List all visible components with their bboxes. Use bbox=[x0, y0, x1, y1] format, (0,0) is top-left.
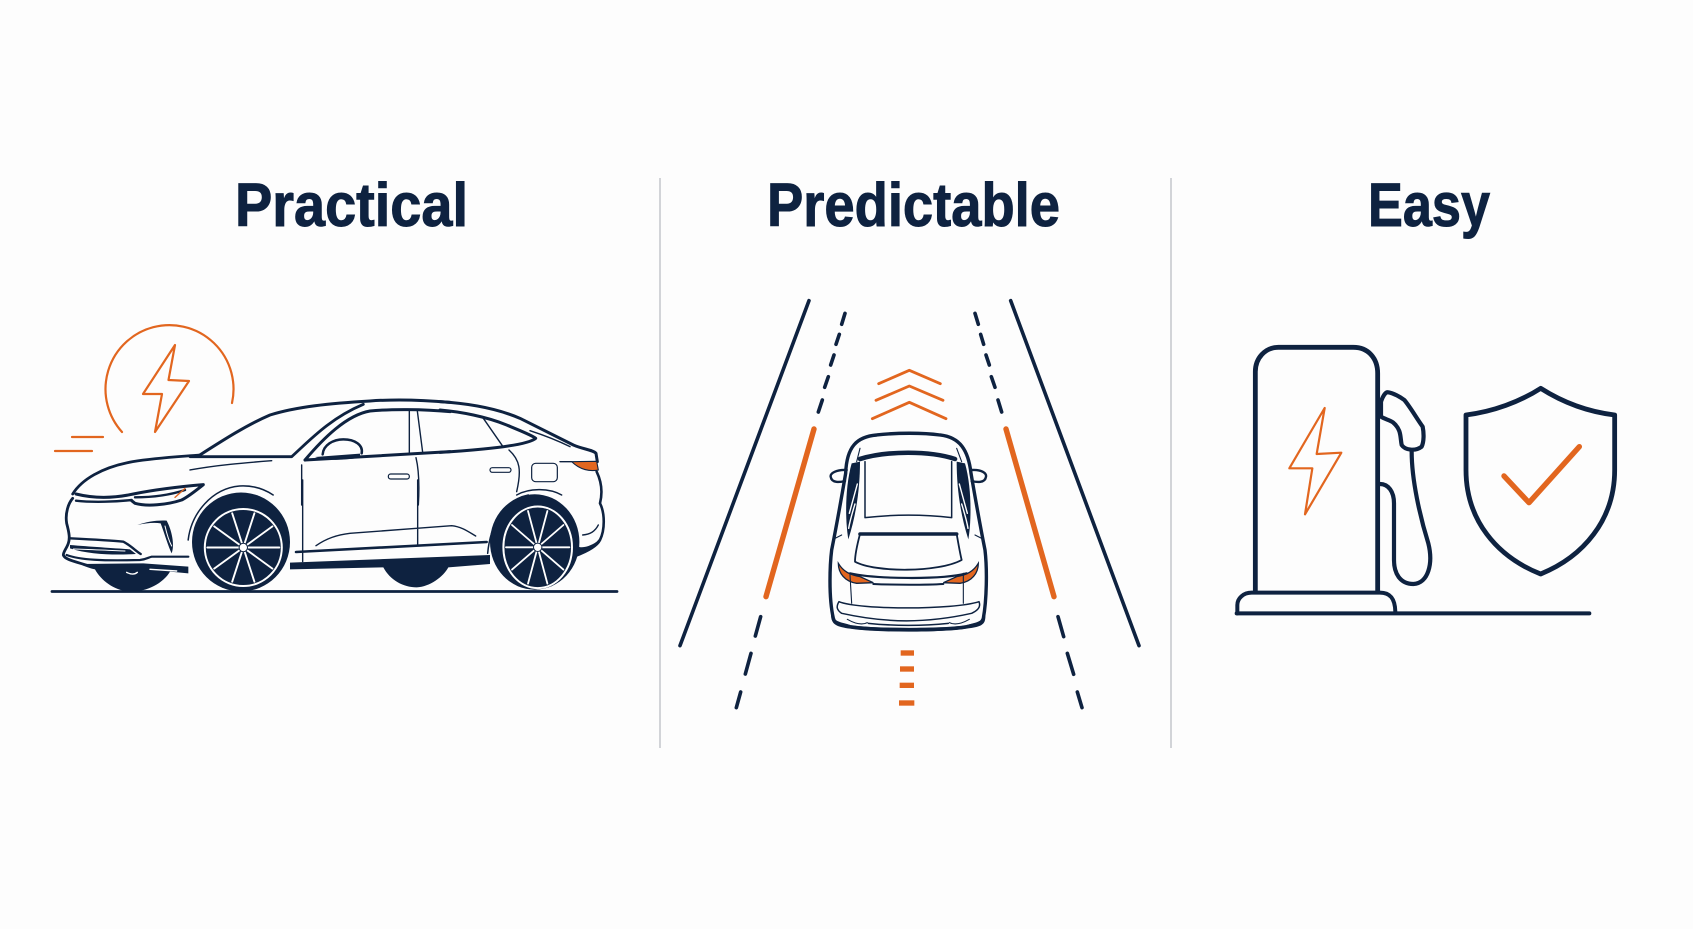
icon: charging station bbox=[1237, 347, 1589, 613]
heading: Practical: Practical bbox=[235, 171, 468, 239]
dashes behind car bbox=[899, 650, 914, 706]
icon: shield with check bbox=[1466, 388, 1615, 574]
panel: practical electric car illustration bbox=[52, 325, 617, 592]
divider: left bbox=[659, 178, 661, 748]
car rear top view bbox=[830, 433, 986, 632]
heading: Predictable: Predictable bbox=[767, 171, 1060, 239]
car cabin and windows bbox=[190, 400, 450, 505]
car sill and door creases bbox=[290, 480, 490, 587]
rear wheel bbox=[490, 494, 579, 590]
car hood and fenders bbox=[73, 455, 273, 540]
icon: electric bolt in arc with speed lines bbox=[55, 325, 234, 451]
ground line bbox=[52, 590, 617, 593]
divider: right bbox=[1170, 178, 1172, 748]
forward chevrons bbox=[872, 370, 946, 419]
panel: predictable road illustration bbox=[680, 301, 1139, 708]
front wheel bbox=[192, 492, 290, 592]
panel: easy charging illustration bbox=[1237, 347, 1615, 613]
dashed lane markings bbox=[736, 313, 1082, 708]
orange lane guides bbox=[766, 429, 1054, 597]
car rear section bbox=[440, 402, 604, 556]
icon: bolt on charger bbox=[1289, 408, 1341, 514]
heading: Easy: Easy bbox=[1368, 171, 1490, 239]
road edges bbox=[680, 301, 1139, 646]
car front fascia bbox=[63, 485, 203, 592]
